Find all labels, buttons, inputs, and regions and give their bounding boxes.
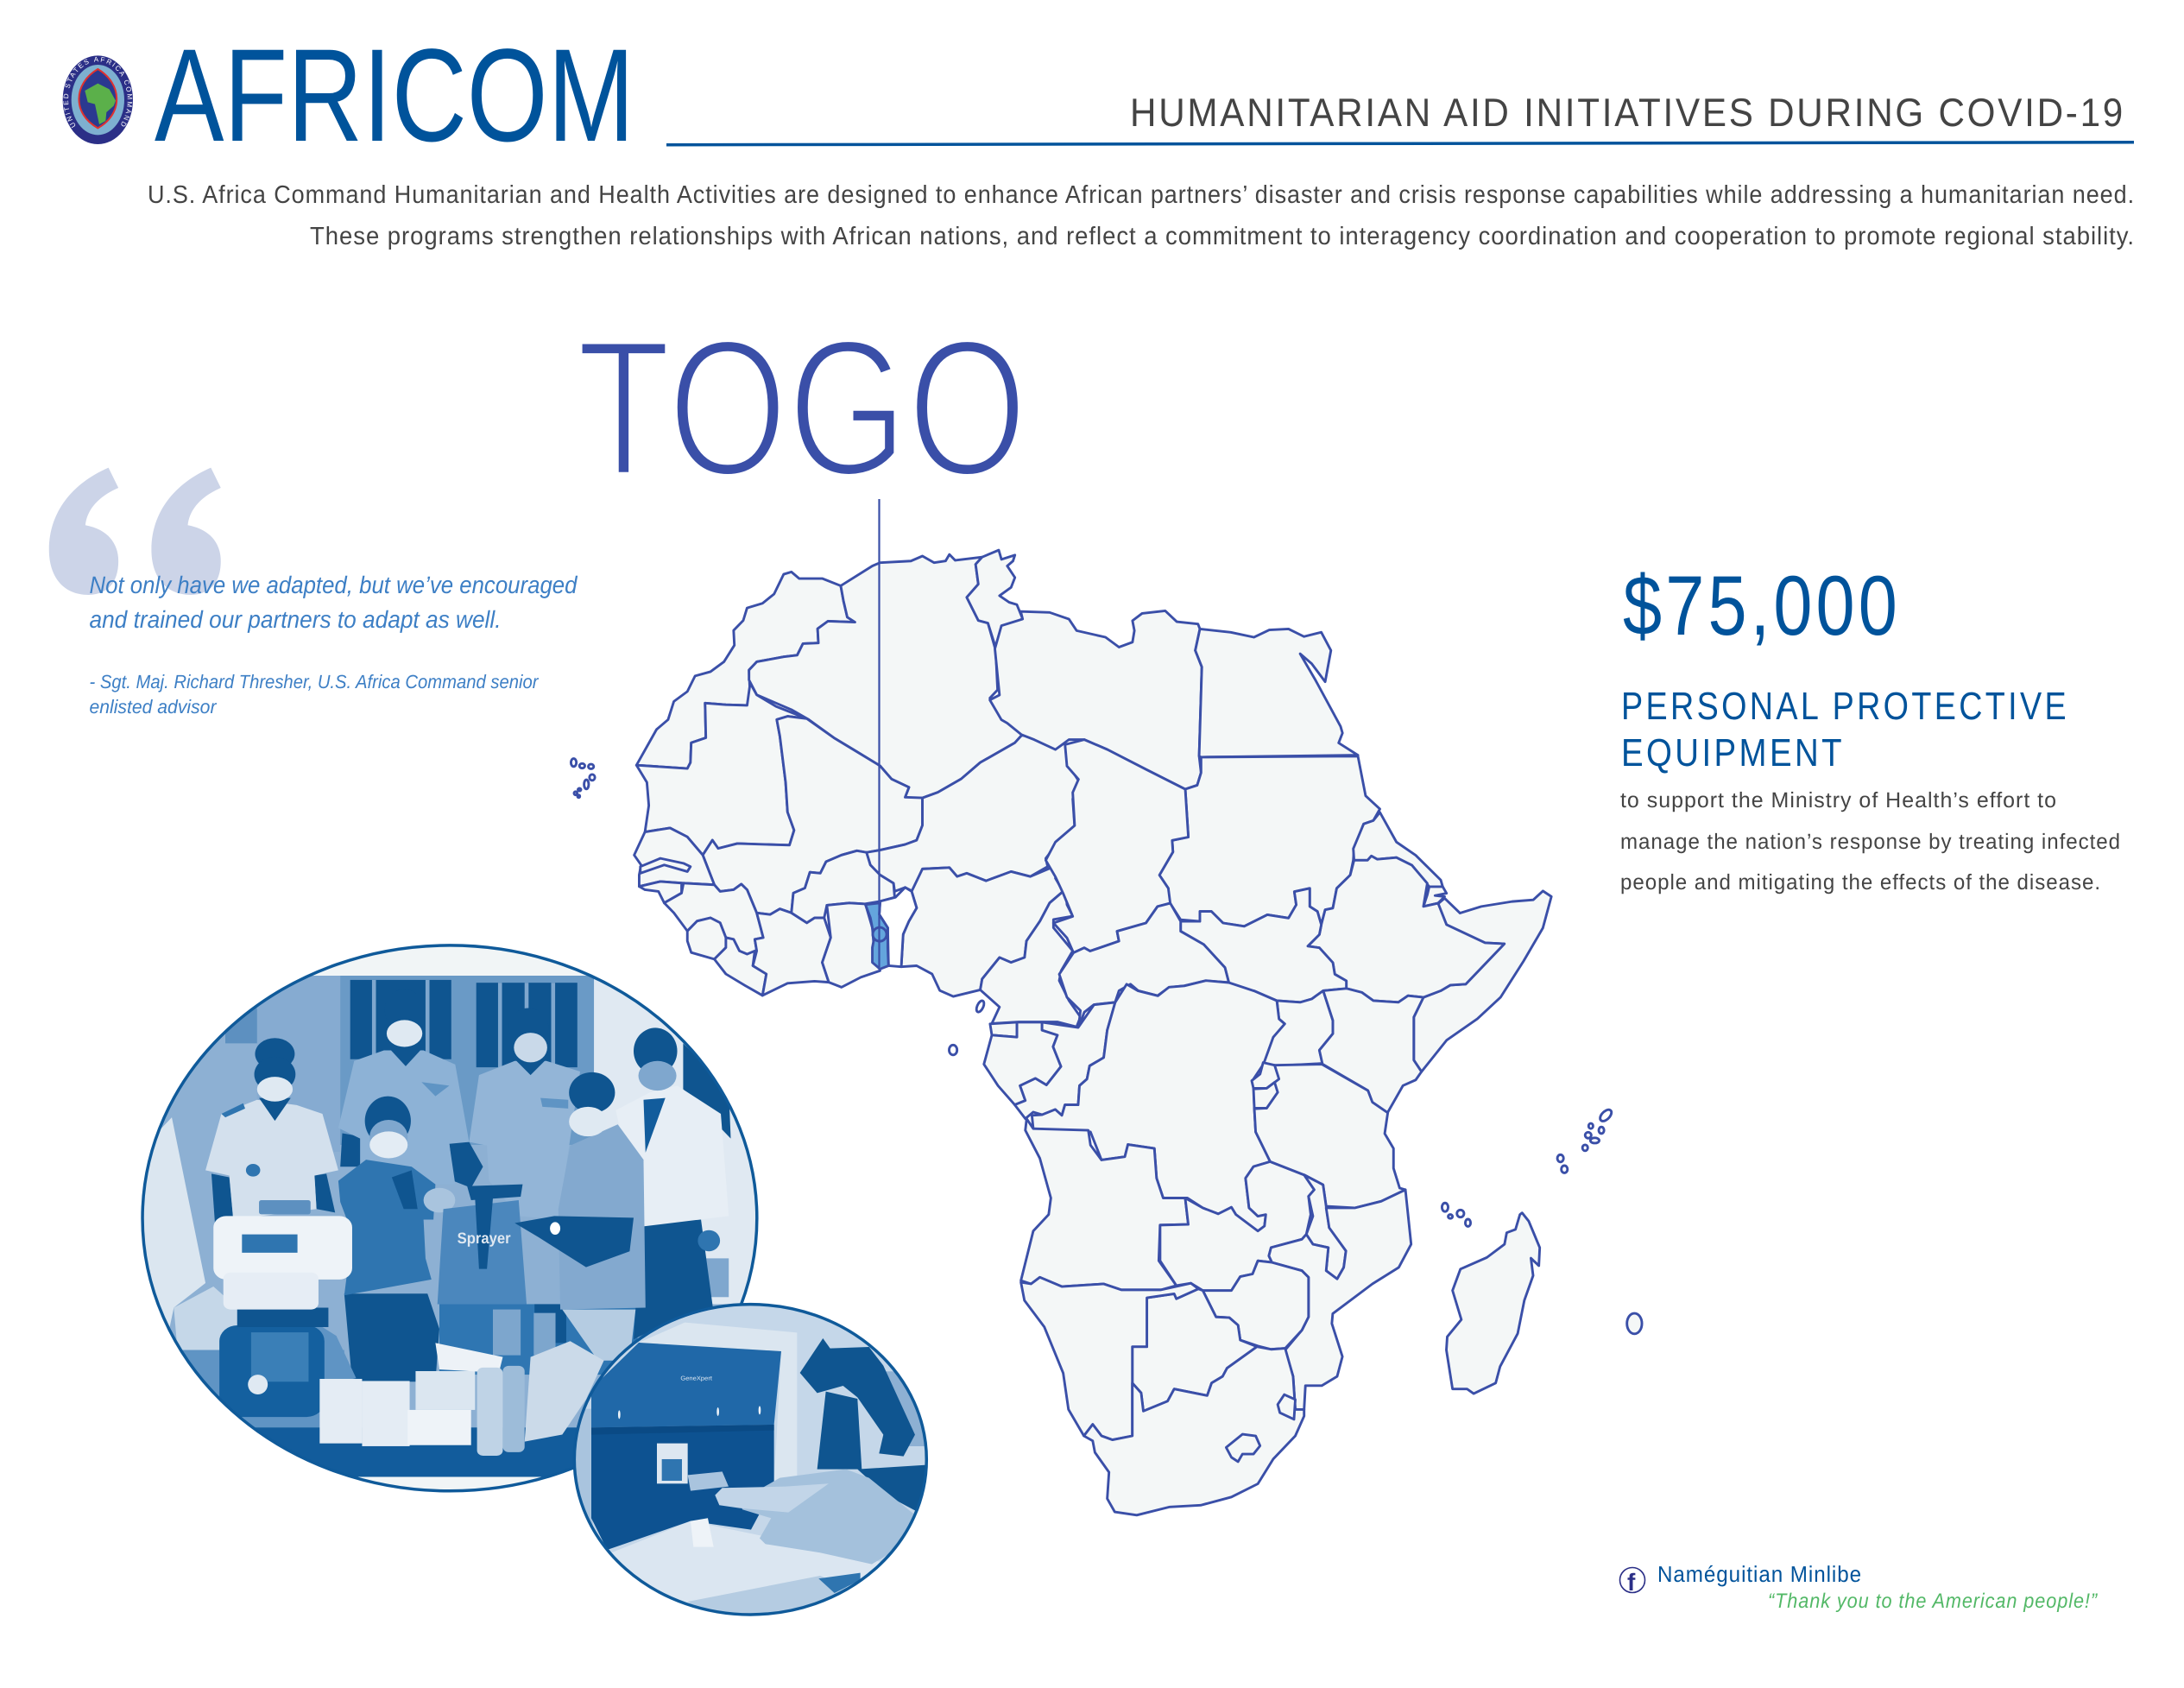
person: officer front right (514, 1072, 646, 1361)
quote text (90, 572, 578, 718)
subtitle: humanitarian aid initiatives: HUMANITARIAN AID INITIATIVES DURING COVID-19 (1130, 90, 2125, 135)
person: woman front (338, 1097, 455, 1381)
heading: TOGO: TOGO (577, 299, 1027, 516)
title: AFRICOM: AFRICOM (155, 22, 634, 169)
description text: manage the nation’s response by treating infected (1620, 830, 2121, 854)
facebook comment name: Naméguitian Minlibe (1657, 1561, 1862, 1587)
heading: personal protective equipment (1621, 684, 2069, 774)
north-east Africa countries (990, 610, 1551, 1113)
description text: to support the Ministry of Health’s effort to (1620, 788, 2057, 812)
equipment: sprayer pack: Sprayer (458, 1230, 511, 1247)
person: officer left (205, 1038, 338, 1230)
description text (1620, 788, 2121, 895)
icon: facebook (1619, 1568, 1645, 1596)
equipment: sprayer pack (438, 1185, 527, 1304)
photo: handover group (138, 945, 761, 1491)
heading: personal protective equipment: PERSONAL PROTECTIVE (1621, 684, 2069, 728)
intro text: These programs strengthen relationships with African nations, and reflect a commitment to interagency coordination and cooperation to promote regional stability. (310, 223, 2135, 250)
equipment: backpack fogger (213, 1200, 357, 1417)
person: officer back centre (340, 1020, 483, 1186)
islands: Indian Ocean and Gulf of Guinea (949, 1045, 1642, 1334)
quote text: Not only have we adapted, but we’ve encouraged (90, 572, 578, 598)
logo: US Africa Command seal: UNITED STATES AFRICA COMMAND (64, 57, 133, 128)
facebook comment quote: “Thank you to the American people!” (1768, 1590, 2098, 1613)
stat: $75,000: $75,000 (1623, 558, 1901, 653)
southern and central Africa countries (949, 981, 1642, 1515)
person: officer back right (470, 1008, 580, 1145)
icon: quotation marks (49, 468, 221, 595)
quote text: enlisted advisor (90, 696, 218, 718)
islands: Cape Verde (571, 759, 986, 1013)
header rule (666, 141, 2134, 147)
quote text: and trained our partners to adapt as well. (90, 606, 501, 633)
heading: personal protective equipment: EQUIPMENT (1621, 730, 1845, 774)
intro text (148, 181, 2135, 250)
map: Africa (571, 550, 1642, 1515)
photo: lab instrument and gloved hand (570, 1299, 932, 1619)
instrument label: GeneXpert (680, 1375, 712, 1381)
pointer line to Togo (878, 499, 881, 967)
icon: facebook: f (1627, 1569, 1636, 1596)
quote text: - Sgt. Maj. Richard Thresher, U.S. Africa Command senior (90, 671, 540, 692)
highlighted country: Togo (866, 903, 888, 969)
person: man in white shirt (634, 1027, 722, 1340)
west Africa countries (571, 550, 1081, 1027)
description text: people and mitigating the effects of the disease. (1620, 870, 2101, 895)
supplies: boxes, bottles and bag (319, 1310, 604, 1456)
